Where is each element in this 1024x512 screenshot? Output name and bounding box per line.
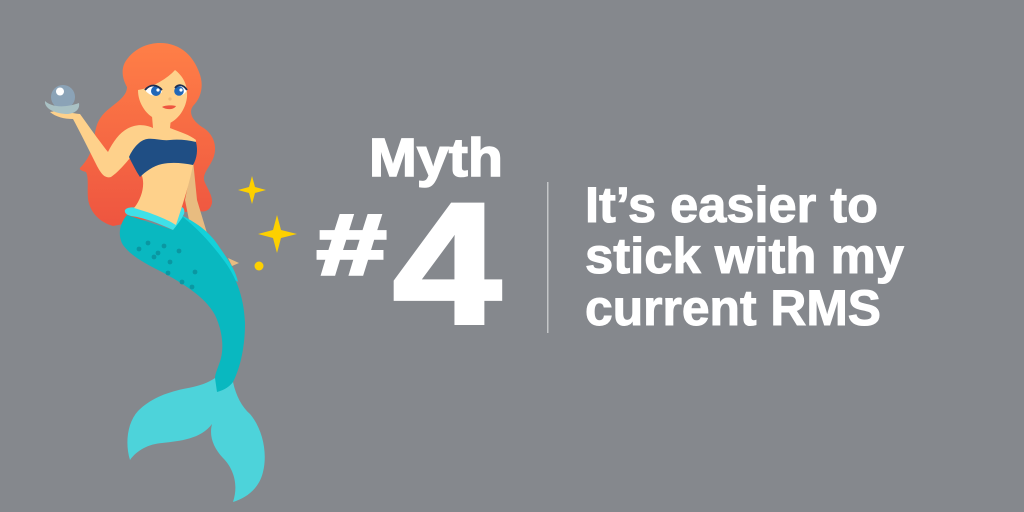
numeral 4: 4	[393, 168, 501, 360]
heading: Myth: Myth	[369, 128, 503, 188]
fin	[127, 378, 265, 502]
myth statement: current RMS	[585, 280, 881, 336]
tail	[120, 215, 245, 392]
back arm	[185, 160, 207, 233]
sparkle small	[238, 176, 266, 204]
illustration: mermaid	[45, 43, 265, 502]
sparkle dot	[254, 262, 264, 270]
face	[138, 70, 187, 123]
myth statement: stick with my	[585, 228, 904, 284]
tail highlight	[176, 216, 238, 282]
tail waistband	[125, 207, 184, 230]
eye left	[145, 86, 162, 96]
torso and arm	[50, 111, 196, 225]
sparkle large	[258, 215, 297, 253]
hair	[80, 43, 215, 226]
myth statement	[585, 177, 904, 336]
pearl in shell	[45, 85, 79, 114]
shell	[45, 101, 79, 114]
eye right	[174, 85, 187, 96]
divider	[547, 182, 548, 333]
nose	[168, 97, 172, 101]
scales	[137, 241, 197, 289]
hand on tail	[228, 258, 239, 266]
myth statement: It’s easier to	[585, 177, 878, 233]
hash symbol: #	[317, 198, 386, 293]
lips	[162, 105, 176, 109]
pearl	[51, 85, 75, 109]
pearl highlight	[56, 88, 64, 96]
bandeau top	[129, 139, 197, 177]
